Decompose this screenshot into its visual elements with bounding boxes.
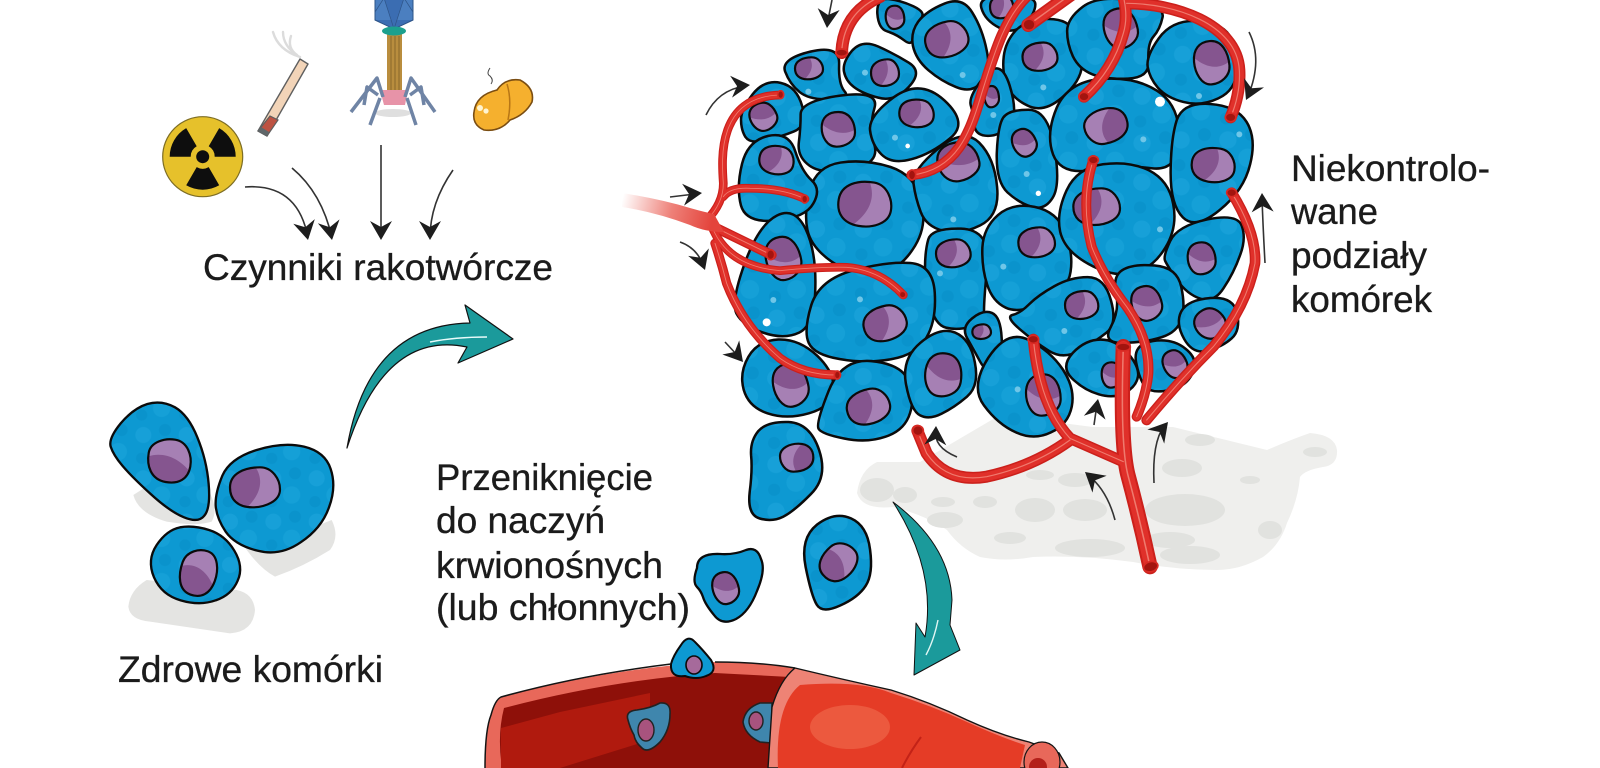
arrow (680, 242, 715, 274)
tumour cell (1147, 21, 1239, 104)
tumour cell (818, 361, 912, 440)
tumour cell (1059, 163, 1174, 274)
tumour cell (785, 50, 846, 99)
tube body (778, 684, 1025, 768)
tumour cell (978, 337, 1073, 437)
large tumour cell (806, 161, 923, 274)
tumour cell (1050, 79, 1179, 171)
label: uncontrolled divisions: komórek (1291, 279, 1432, 320)
label: healthy cells: Zdrowe komórki (118, 649, 383, 690)
tumour cell (799, 94, 875, 171)
tumour cell (1171, 104, 1253, 222)
arrow (1084, 397, 1109, 425)
shed tumour cell (804, 516, 875, 609)
label: invasion of vessels: (lub chłonnych) (436, 587, 690, 628)
tumour cell (1010, 277, 1113, 355)
tumour blood vessel network (622, 0, 1255, 573)
arrow (1236, 32, 1264, 105)
vesicle (1061, 328, 1067, 334)
icon: cigarette (258, 32, 308, 136)
healthy cell 2 (216, 445, 333, 552)
tumour cell (741, 82, 804, 142)
lower-right tumour cells (1010, 265, 1239, 396)
tumour cell (1067, 0, 1163, 79)
arrow: cigarette to label (292, 168, 343, 242)
circulating cell partly hidden (743, 703, 772, 743)
tumour cell (1108, 265, 1183, 343)
tumour cell (735, 213, 815, 336)
label: uncontrolled divisions: Niekontrolo- (1291, 148, 1490, 189)
shed tumour cell (749, 422, 822, 520)
tumour cell (1003, 19, 1082, 108)
vesicles in upper-right cells (1140, 93, 1242, 232)
tumour cell (742, 339, 834, 419)
icon: bacteriophage virus (351, 0, 435, 125)
icon: yellow bacterium (474, 68, 532, 130)
arrow: teal, tumour to blood vessel (893, 502, 960, 675)
blood vessel (485, 639, 1068, 768)
tumour cell (925, 229, 988, 329)
cell shadows (128, 480, 335, 633)
healthy cell 3 (151, 527, 240, 603)
arrow (1251, 193, 1274, 263)
arrow (1147, 415, 1176, 483)
circulating cell (627, 703, 670, 750)
vesicles in lower-left cells (1015, 328, 1067, 392)
lower-left tumour cells and shed cell (742, 312, 1073, 609)
feeding vessel trunk fading in (622, 193, 724, 232)
tumour cell (982, 206, 1071, 310)
label: uncontrolled divisions: wane (1290, 191, 1378, 232)
tumour cell (912, 1, 988, 90)
vessel openings, upper right (1023, 19, 1237, 197)
tube highlight (810, 705, 890, 749)
arrow (924, 426, 957, 457)
tumour cell (877, 0, 923, 43)
arrow (706, 74, 751, 115)
tumour cell (1066, 340, 1138, 396)
tumour cell (844, 44, 916, 99)
vessel openings, upper left (767, 49, 916, 379)
cell entering vessel (671, 639, 714, 678)
label: uncontrolled divisions: podziały (1291, 235, 1427, 276)
tumour cell (913, 136, 997, 232)
upper-right tumour cells (1050, 0, 1253, 300)
label: invasion of vessels: do naczyń (436, 500, 605, 541)
arrow: radiation to label (245, 187, 319, 242)
tumour cell (739, 135, 817, 221)
growth arrows around tumour (670, 0, 1274, 520)
arrow (816, 0, 840, 29)
upper-left tumour cells (735, 0, 1082, 361)
icon: radiation hazard symbol (163, 117, 243, 197)
lighter lumen patch (501, 693, 650, 768)
shed cancer cell near vessel (694, 549, 763, 622)
arrow (670, 182, 703, 206)
arrow (722, 340, 751, 369)
label: invasion of vessels: Przeniknięcie (436, 457, 653, 498)
tumour cell (1136, 340, 1197, 391)
tube opening (1024, 742, 1060, 768)
heading: carcinogens: Czynniki rakotwórcze (203, 247, 553, 288)
tumour cell (965, 312, 1002, 370)
tumour cell (997, 110, 1057, 208)
tumour cell (905, 331, 976, 417)
arrow: bacterium to label (419, 170, 453, 240)
tumour cell (970, 68, 1014, 136)
grey tissue under tumour (857, 415, 1337, 570)
healthy cells group (110, 403, 335, 633)
arrow (1078, 464, 1115, 520)
tumour cell (870, 88, 958, 161)
back wall (485, 662, 795, 768)
tube crease (902, 737, 921, 768)
vesicles in upper-left cells (763, 70, 1046, 326)
outer tube (768, 668, 1068, 768)
label: invasion of vessels: krwionośnych (436, 545, 663, 586)
inner lumen (500, 673, 790, 768)
label: invasion of vessels (436, 457, 690, 628)
vessel strokes (707, 0, 1255, 567)
rim outline (485, 662, 795, 768)
tumour cell (981, 0, 1035, 31)
tumour cell (1165, 217, 1244, 300)
label: uncontrolled divisions (1290, 148, 1490, 320)
vessel openings, lower (913, 335, 1159, 573)
tumour cell (807, 263, 935, 361)
arrow: virus to label (370, 145, 392, 240)
tumour mass: cancer cells (735, 0, 1253, 609)
arrow: teal, healthy cells to carcinogens (347, 305, 513, 448)
healthy cell 1 (110, 403, 209, 520)
tumour cell (1179, 298, 1239, 352)
